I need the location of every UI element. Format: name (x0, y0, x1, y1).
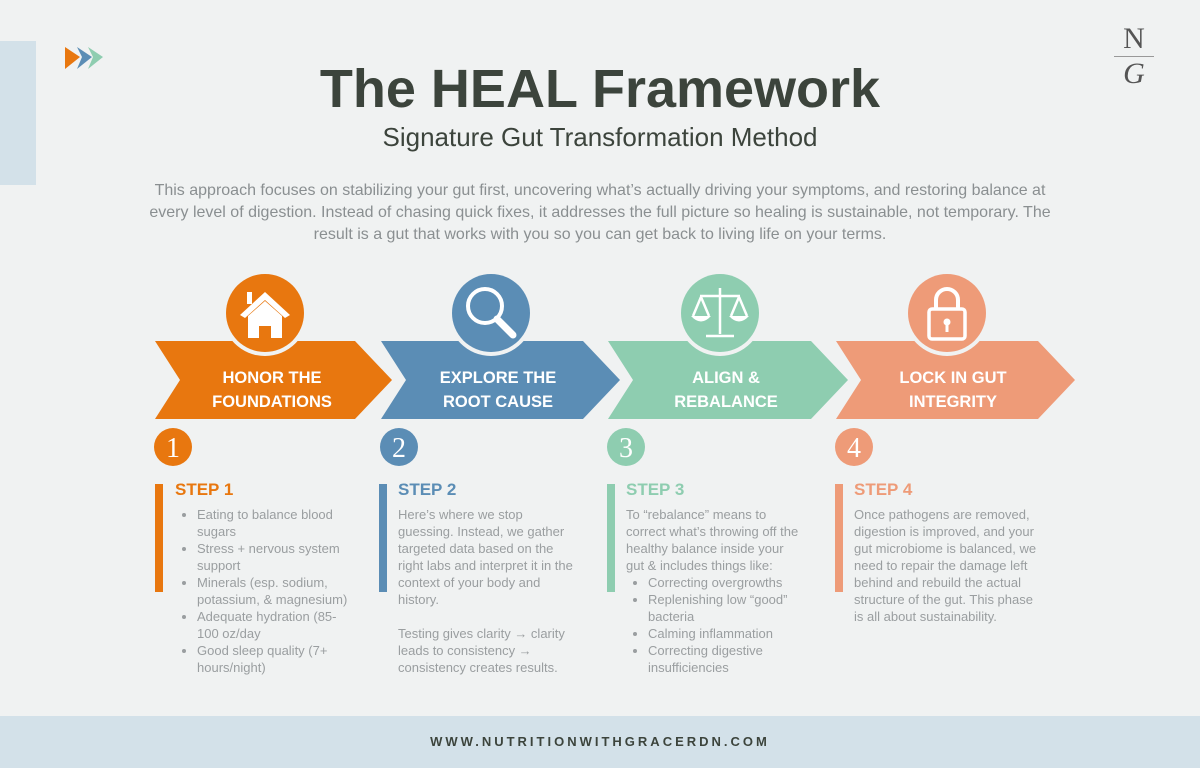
footer: WWW.NUTRITIONWITHGRACERDN.COM (430, 734, 770, 749)
arrow 4: INTEGRITY (909, 393, 997, 411)
step 1 text: Minerals (esp. sodium, potassium, & magnesium) (197, 575, 347, 607)
icon: scales (677, 270, 763, 356)
icon: house (222, 270, 308, 356)
process arrows (154, 274, 1075, 466)
step number badges: 2 (392, 433, 406, 464)
accent bars (155, 484, 163, 592)
step 1 text: Good sleep quality (7+ hours/night) (197, 643, 327, 675)
icon: padlock (904, 270, 990, 356)
icon: triple arrows (65, 47, 103, 69)
arrow 1 (155, 341, 392, 419)
decorative side block (0, 41, 36, 185)
icon: magnifier (448, 270, 534, 356)
step 3 text: STEP 3 (626, 480, 684, 499)
step 2 text: STEP 2 (398, 480, 456, 499)
step number badges (154, 428, 873, 466)
arrow 1: HONOR THE (222, 369, 322, 387)
step number badges: 4 (847, 433, 861, 464)
step 2 text: Testing gives clarity → clarity leads to consistency → consistency creates results. (398, 626, 565, 675)
step 3 text: To “rebalance” means to correct what’s throwing off the healthy balance inside your gut & includes things like: (626, 507, 798, 573)
step 2 text: Here’s where we stop guessing. Instead, we gather targeted data based on the right labs and interpret it in the context of your body and history. (398, 507, 573, 607)
arrow 3: ALIGN & (692, 369, 760, 387)
step 4 text: STEP 4 (854, 480, 912, 499)
title: The HEAL Framework (320, 59, 880, 119)
step 3 text: Calming inflammation (648, 626, 773, 641)
subtitle: Signature Gut Transformation Method (382, 122, 818, 152)
step 3 text: Correcting overgrowths (648, 575, 782, 590)
step 1 text: Adequate hydration (85-100 oz/day (197, 609, 336, 641)
arrow 2: EXPLORE THE (440, 369, 556, 387)
step 3 text: Correcting digestive insufficiencies (648, 643, 763, 675)
step number badges: 1 (166, 433, 180, 464)
logo: N (1123, 22, 1145, 55)
step 3 text (626, 480, 798, 675)
arrow 2 (381, 341, 620, 419)
step 1 text: STEP 1 (175, 480, 233, 499)
logo: G (1123, 57, 1145, 90)
step 1 text (175, 480, 347, 675)
step 3 text: Replenishing low “good” bacteria (648, 592, 787, 624)
arrow 4: LOCK IN GUT (899, 369, 1007, 387)
step number badges: 3 (619, 433, 633, 464)
arrow 3: REBALANCE (674, 393, 778, 411)
intro text: This approach focuses on stabilizing your gut first, uncovering what’s actually driving your symptoms, and restoring balance at every level of digestion. Instead of chasing quick fixes, it addresses the full picture so healing is sustainable, not temporary. The result is a gut that works with you so you can get back to living life on your terms. (149, 182, 1051, 243)
footer (0, 716, 1200, 768)
arrow 3 (608, 341, 848, 419)
arrow 1: FOUNDATIONS (212, 393, 332, 411)
arrow 2: ROOT CAUSE (443, 393, 553, 411)
step 1 text: Stress + nervous system support (197, 541, 340, 573)
step 2 text (398, 480, 573, 675)
arrow 4 (836, 341, 1075, 419)
logo (1114, 22, 1154, 90)
step 1 text: Eating to balance blood sugars (197, 507, 333, 539)
step 4 text: Once pathogens are removed, digestion is improved, and your gut microbiome is balanced, we need to repair the damage left behind and rebuild the actual structure of the gut. This phase is all about sustainability. (854, 507, 1036, 624)
